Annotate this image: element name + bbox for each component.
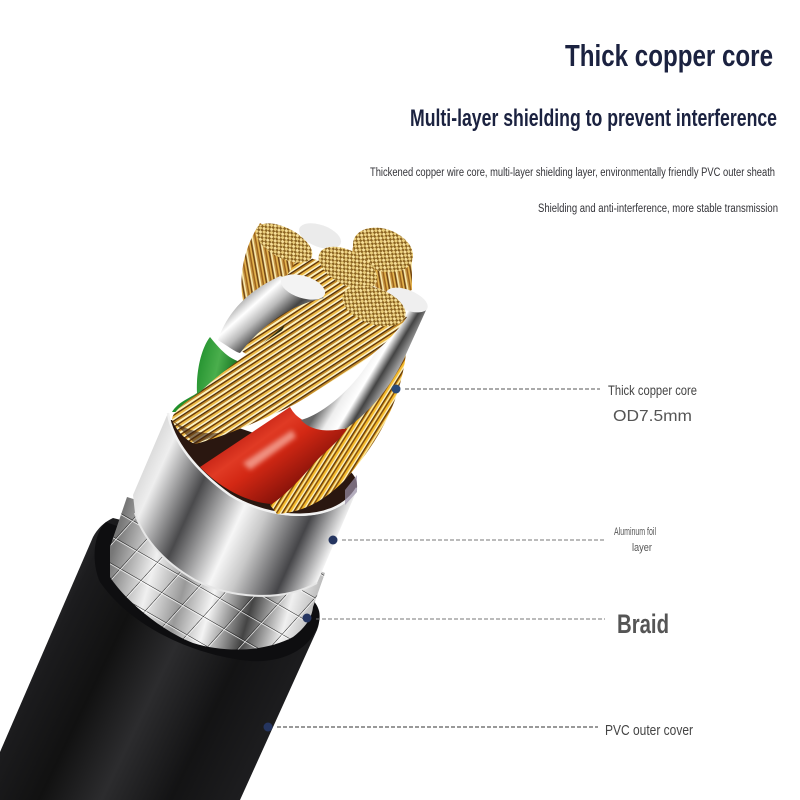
- callout: aluminum foil layer: layer: [632, 542, 652, 554]
- callout: aluminum foil layer: Aluminum foil: [614, 526, 656, 538]
- callout: thick copper core: Thick copper core: [608, 382, 697, 398]
- purple inner reflection: [345, 475, 357, 505]
- right silver conductor: [301, 282, 431, 430]
- callout: braid: Braid: [617, 609, 669, 639]
- green insulated wire: [172, 337, 247, 412]
- foil inner opening: [170, 420, 357, 515]
- callout: PVC outer cover: [264, 722, 693, 739]
- outer PVC jacket: [0, 518, 319, 800]
- callout: aluminum foil layer: [328, 526, 656, 554]
- illustration: cable cross-section: [0, 215, 431, 800]
- red insulated wire: [200, 407, 347, 504]
- red wire highlight: [243, 430, 296, 470]
- jacket rim: [95, 522, 320, 661]
- callout: thick copper core: [392, 382, 697, 425]
- right gold strand: [270, 345, 407, 514]
- main diagonal gold strand: [172, 278, 411, 444]
- callout: braid: [302, 609, 669, 639]
- back gold strands: [240, 215, 419, 370]
- left silver conductor: [218, 269, 328, 353]
- callout: thick copper core: OD7.5mm: [613, 408, 692, 425]
- aluminum foil layer: [133, 413, 357, 596]
- braid shield: [110, 497, 325, 650]
- callout: PVC outer cover: PVC outer cover: [605, 723, 693, 739]
